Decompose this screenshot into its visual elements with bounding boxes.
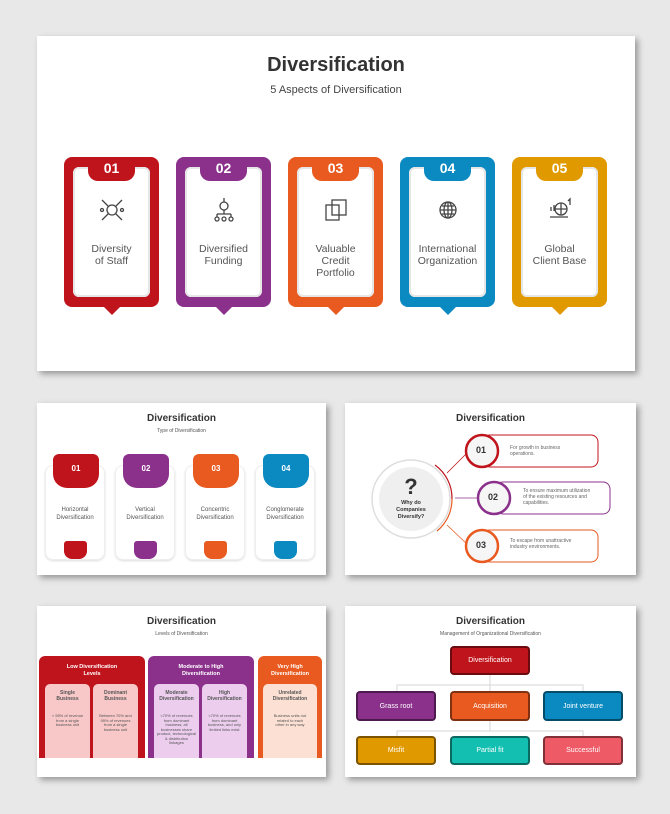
icon: client base [550, 198, 571, 218]
level: very high: Business units not [274, 713, 306, 718]
level: very high: Diversification [271, 671, 309, 677]
center text: ? [404, 474, 418, 499]
card 01: Diversity [91, 243, 132, 255]
reason 02 [488, 488, 590, 506]
type 01 [45, 465, 105, 560]
level: very high: Very High [277, 664, 303, 670]
level: very high: Unrelated [278, 690, 302, 696]
slide: why diversify: 03 [476, 540, 486, 550]
card 04: Organization [418, 255, 477, 267]
level: low: Low Diversification [67, 664, 117, 670]
level: low: Business [56, 696, 79, 702]
card 04 [400, 157, 495, 307]
level: very high [258, 656, 322, 758]
level: low: from a single [104, 722, 127, 727]
card 03 [288, 157, 383, 307]
subtitle: Levels of Diversification [155, 631, 208, 637]
card 05: Global [544, 243, 575, 255]
level: low: Between 70% and [99, 713, 132, 718]
level: moderate: Moderate to High [179, 664, 223, 670]
connectors [396, 675, 584, 736]
level: low: business unit [56, 722, 79, 727]
level: moderate: product, technological [157, 731, 196, 736]
slide: management [345, 606, 636, 777]
icon: funding [214, 198, 234, 222]
level: low [39, 656, 145, 758]
level: very high: other in any way [275, 722, 305, 727]
level: moderate: from dominant [164, 718, 189, 722]
slide: types [37, 403, 326, 575]
box: Misfit: Misfit [388, 747, 404, 754]
icon: staff [100, 200, 124, 220]
type 03 [185, 465, 245, 560]
slide: why diversify: of the existing resources and [523, 494, 587, 500]
card 03: Valuable [315, 243, 356, 255]
level: moderate: from dominant [212, 718, 237, 722]
reason 03 [476, 538, 572, 550]
box: Diversification [450, 646, 530, 675]
box: Joint venture [543, 691, 623, 721]
level: moderate: business; all [165, 722, 188, 727]
slide: why diversify: 02 [488, 492, 498, 502]
reason 01 [476, 445, 560, 457]
box: Diversification: Diversification [468, 657, 512, 664]
level: low: Single [60, 690, 75, 696]
level: moderate: Moderate [165, 690, 188, 696]
card 02: 02 [216, 160, 231, 176]
slide: why diversify [345, 403, 636, 575]
type 04: Conglomerate [266, 507, 304, 513]
icon: portfolio [325, 199, 347, 221]
card 01: of Staff [95, 255, 128, 267]
reason 02: To ensure maximum utilization [523, 488, 590, 494]
card 01 [64, 157, 159, 307]
reason 03: To escape from unattractive [510, 538, 571, 544]
level: very high: Diversification [273, 696, 307, 702]
box: Partial fit: Partial fit [476, 747, 504, 754]
slide: levels [37, 606, 326, 777]
level: low: 95% of revenues [100, 718, 131, 722]
level: moderate: & distribution [165, 736, 188, 740]
level: moderate: Diversification [182, 671, 220, 677]
level: moderate: Diversification [159, 696, 194, 702]
main slide: 5 aspects [37, 36, 635, 371]
level: low: from a single [56, 718, 79, 722]
type 03: Concentric [201, 507, 229, 513]
slide: why diversify: 01 [476, 445, 486, 455]
box: Partial fit [450, 736, 530, 765]
center text: Companies [396, 507, 426, 513]
center text [396, 474, 426, 520]
title: Diversification [456, 616, 525, 627]
title: Diversification [267, 54, 405, 76]
slide: why diversify: operations. [510, 451, 535, 457]
title: Diversification [147, 616, 216, 627]
card 05: 05 [552, 160, 567, 176]
subtitle: 5 Aspects of Diversification [270, 84, 402, 96]
card 01: 01 [104, 160, 119, 176]
card 02: Diversified [199, 243, 248, 255]
type 04 [255, 465, 315, 560]
box: Grass root [356, 691, 436, 721]
level: very high: related to each [277, 718, 303, 722]
box: Acquisition [450, 691, 530, 721]
type 04: Diversification [266, 515, 304, 521]
diagram [371, 434, 610, 564]
level: moderate: <70% of revenues [208, 713, 241, 718]
icon: globe [439, 201, 457, 219]
card 02: Funding [205, 255, 242, 267]
subtitle: Type of Diversification [157, 428, 206, 434]
type 03: 03 [212, 464, 220, 473]
subtitle: Management of Organizational Diversification [440, 631, 541, 637]
box: Successful: Successful [566, 747, 600, 754]
box: Joint venture: Joint venture [563, 702, 603, 710]
slide: why diversify: For growth in business [510, 445, 560, 451]
card 03: Credit [321, 255, 350, 267]
slide: why diversify: capabilities. [523, 500, 549, 506]
box: Successful [543, 736, 623, 765]
type 02 [115, 465, 175, 560]
card 03: 03 [328, 160, 343, 176]
type 01: 01 [72, 464, 80, 473]
type 02: 02 [142, 464, 150, 473]
level: moderate: Diversification [207, 696, 242, 702]
box: Acquisition: Acquisition [473, 702, 507, 710]
card 05: Client Base [533, 255, 586, 267]
box: Grass root: Grass root [380, 702, 412, 710]
type 02: Diversification [126, 515, 164, 521]
title: Diversification [456, 413, 525, 424]
type 01: Diversification [56, 515, 94, 521]
level: low: < 95% of revenue [52, 713, 83, 718]
level: moderate: linkages [169, 740, 184, 745]
level: moderate: High [219, 690, 230, 696]
level: moderate [148, 656, 254, 758]
level: moderate: businesses share [161, 726, 192, 732]
center text: Diversify? [398, 514, 424, 520]
level: low: Business [104, 696, 127, 702]
slide: why diversify: industry environments. [510, 544, 560, 550]
card 04: International [419, 243, 476, 255]
type 04: 04 [282, 464, 290, 473]
title: Diversification [147, 413, 216, 424]
level: moderate: limited links exist [209, 726, 240, 732]
type 01: Horizontal [61, 507, 88, 513]
card 02 [176, 157, 271, 307]
card 03: Portfolio [316, 267, 355, 279]
level: low: Dominant [104, 690, 127, 696]
box: Misfit [356, 736, 436, 765]
type 02: Vertical [135, 507, 155, 513]
level: low: business unit [104, 726, 127, 732]
level: moderate: business, and only [208, 722, 241, 727]
type 03: Diversification [196, 515, 234, 521]
level: low: Levels [83, 671, 101, 677]
center text: Why do [401, 500, 421, 506]
card 04: 04 [440, 160, 455, 176]
card 05 [512, 157, 607, 307]
level: moderate: <70% of revenues [160, 713, 193, 718]
